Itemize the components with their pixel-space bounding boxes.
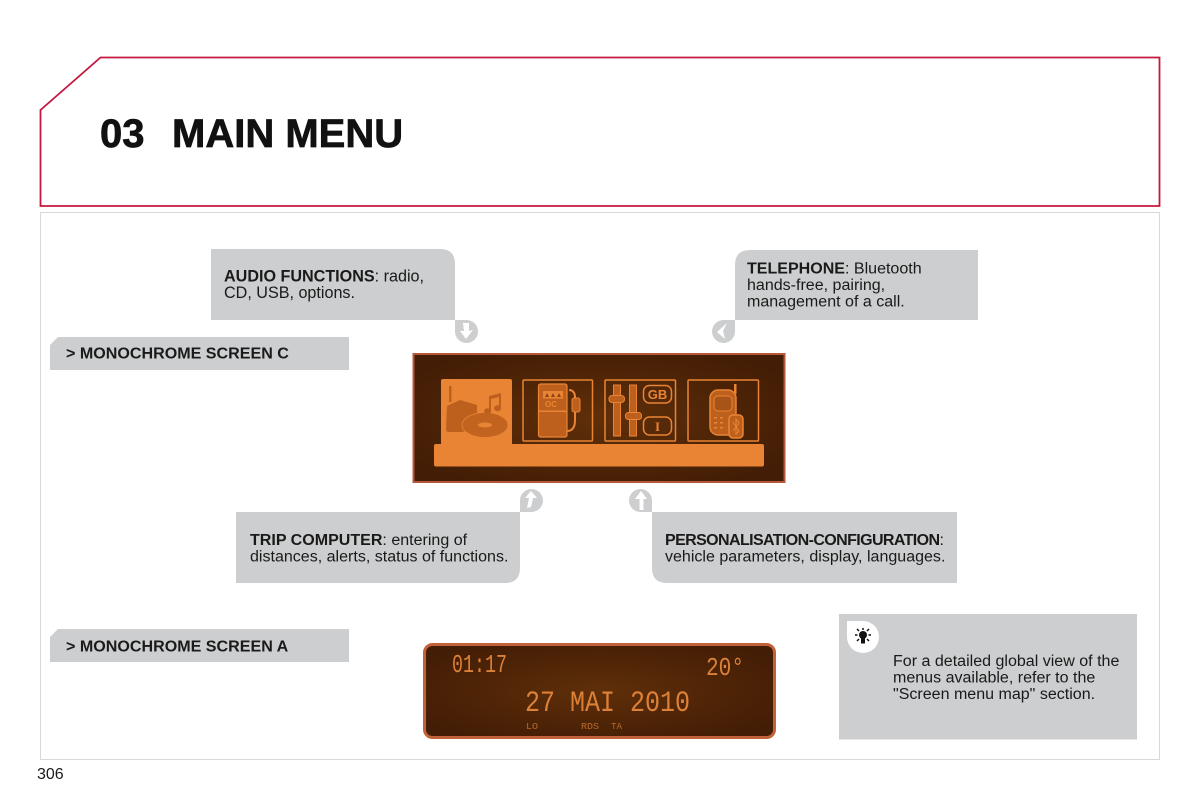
highlight bar [434,444,764,466]
page number: 306 [37,766,64,783]
callout: personalisation-configuration: PERSONALISATION-CONFIGURATION: [665,531,944,549]
callout: trip computer [236,512,520,583]
screen A display [424,644,774,738]
callout: audio functions: AUDIO FUNCTIONS: radio, [224,268,424,286]
callout: audio functions: CD, USB, options. [224,284,355,302]
note box: menus available, refer to the [893,668,1095,686]
callout: trip computer: distances, alerts, status of functions. [250,548,508,566]
icon: settings sliders: I [655,419,660,434]
screen A display: 27 MAI 2010 [525,687,690,721]
screen A display: 01:17 [452,650,507,680]
screen A display: 20° [706,653,744,683]
callout: telephone: hands-free, pairing, [747,276,885,294]
callout: telephone: TELEPHONE: Bluetooth [747,260,922,278]
label: monochrome screen A: > MONOCHROME SCREEN A [66,638,289,656]
icon: light bulb [847,621,879,653]
label: monochrome screen A [50,629,349,662]
icon: fuel pump [523,380,592,441]
note box: For a detailed global view of the [893,652,1119,670]
screen A display: RDS [581,722,599,732]
icon: arrow telephone [712,320,735,343]
title: MAIN MENU [172,112,403,156]
icon: arrow trip computer [520,489,543,512]
icon: settings sliders: GB [648,387,667,402]
icon: settings sliders [605,380,676,441]
callout: audio functions [211,249,455,320]
callout: telephone: management of a call. [747,292,905,310]
callout: personalisation-configuration [652,512,957,583]
content panel [40,212,1160,760]
callout: trip computer: TRIP COMPUTER: entering of [250,531,468,549]
header frame [40,58,1160,206]
icon: fuel pump: OC [545,400,557,409]
label: monochrome screen C: > MONOCHROME SCREEN C [66,344,289,362]
note box [839,614,1137,740]
label: monochrome screen C [50,337,349,370]
icon: telephone [688,380,758,441]
screen A display: TA [611,722,623,732]
title: 03 [100,112,144,156]
screen A display: LO [526,722,538,732]
icon: audio tab [441,379,512,446]
callout: personalisation-configuration: vehicle parameters, display, languages. [665,548,945,566]
note box: "Screen menu map" section. [893,685,1095,703]
icon: arrow personalisation [629,489,652,512]
icon: arrow audio [455,320,478,343]
callout: telephone [735,250,978,320]
screen C display [414,354,784,482]
